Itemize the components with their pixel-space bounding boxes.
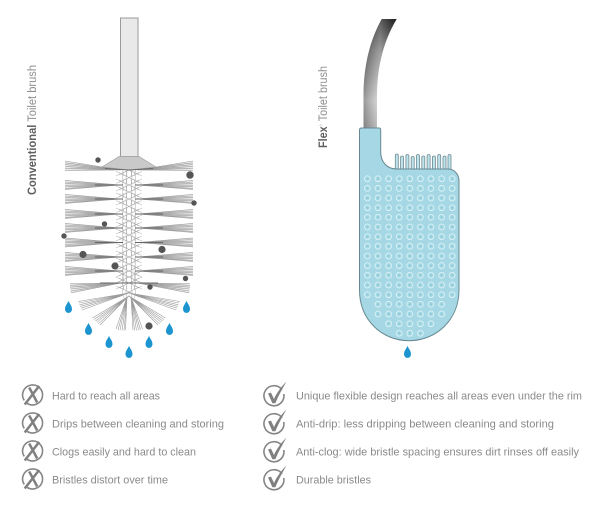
- item: drips: Drips between cleaning and storing: [52, 418, 224, 430]
- brush lattice core: [116, 164, 142, 298]
- brush handle: [120, 18, 138, 156]
- item: flexible design: [264, 382, 582, 406]
- item: bristles distort: [21, 468, 168, 490]
- brush collar: [102, 156, 156, 170]
- item: drips: [21, 412, 224, 434]
- list: flex brush benefits: [264, 382, 582, 490]
- item: anti-drip: [264, 410, 554, 434]
- illustration: flex brush: [360, 19, 459, 358]
- item: anti-clog: Anti-clog: wide bristle spacing ensures dirt rinses off easily: [296, 446, 579, 458]
- list: conventional brush drawbacks: [21, 384, 224, 490]
- illustration: conventional brush: [61, 18, 197, 358]
- label: Flex Toilet brush: °: [320, 124, 326, 126]
- label: Flex Toilet brush: Toilet brush: [318, 66, 330, 124]
- item: hard to reach: [21, 384, 160, 406]
- bristle rows: [65, 161, 193, 330]
- label: Conventional Toilet brush: Conventional Toilet brush: [27, 65, 39, 195]
- item: clogs: Clogs easily and hard to clean: [52, 446, 196, 458]
- label: Flex Toilet brush: Flex: [318, 126, 330, 148]
- dirt particles: [61, 157, 197, 330]
- item: durable: Durable bristles: [296, 474, 371, 486]
- head perforations: [364, 176, 455, 336]
- item: flexible design: Unique flexible design reaches all areas even under the rim: [296, 390, 582, 402]
- curved handle: [364, 19, 397, 128]
- item: clogs: [21, 440, 196, 462]
- item: anti-drip: Anti-drip: less dripping between cleaning and storing: [296, 418, 554, 430]
- item: anti-clog: [264, 438, 579, 462]
- item: hard to reach: Hard to reach all areas: [52, 390, 160, 402]
- water drips: [65, 301, 190, 358]
- item: bristles distort: Bristles distort over time: [52, 474, 168, 486]
- water drip: [404, 346, 411, 358]
- item: durable: [264, 466, 371, 490]
- silicone bristle comb: [395, 154, 451, 172]
- brush head body: [360, 128, 459, 341]
